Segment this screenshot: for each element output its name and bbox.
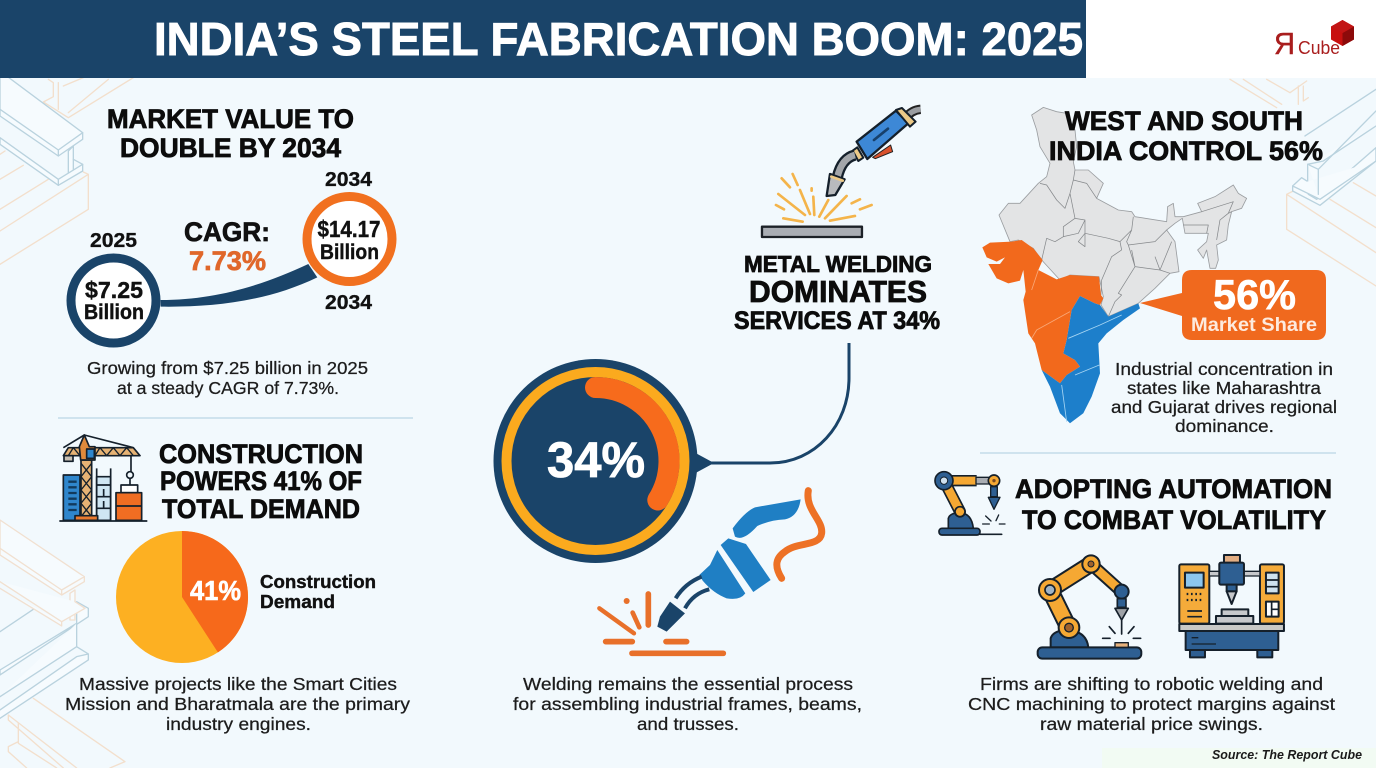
construction description: Massive projects like the Smart Cities bbox=[79, 674, 397, 694]
construction description bbox=[65, 674, 410, 734]
year labels bbox=[90, 169, 373, 314]
logo bbox=[1086, 0, 1376, 78]
heading: metal welding: SERVICES AT 34% bbox=[734, 307, 940, 335]
CAGR label bbox=[184, 217, 270, 276]
callout: 56% market share bbox=[1140, 270, 1326, 340]
heading: market value: DOUBLE BY 2034 bbox=[120, 133, 341, 163]
map: west region bbox=[982, 240, 1103, 383]
regional description bbox=[1111, 359, 1337, 436]
callout: 56% market share: Market Share bbox=[1191, 315, 1317, 336]
construction description: industry engines. bbox=[166, 714, 311, 734]
market value description: Growing from $7.25 billion in 2025 bbox=[87, 358, 368, 378]
pie chart 41% bbox=[116, 531, 248, 663]
growth connector bbox=[161, 264, 317, 307]
year labels: 2034 bbox=[325, 292, 373, 314]
panel: market value bbox=[71, 104, 392, 398]
gauge 34% bbox=[494, 359, 714, 563]
regional description: Industrial concentration in bbox=[1115, 359, 1333, 379]
leader line bbox=[710, 343, 849, 463]
logo: Cube bbox=[1298, 38, 1340, 58]
year labels: 2034 bbox=[325, 169, 373, 191]
circle 2034 value: Billion bbox=[320, 241, 379, 264]
heading: west and south: WEST AND SOUTH bbox=[1065, 106, 1303, 136]
pie legend label: Demand bbox=[260, 591, 335, 612]
title: INDIA’S STEEL FABRICATION BOOM: 2025 bbox=[154, 13, 1083, 65]
market value description bbox=[87, 358, 368, 398]
icon: small robot arm bbox=[935, 472, 1005, 535]
regional description: states like Maharashtra bbox=[1127, 378, 1321, 398]
welding description: Welding remains the essential process bbox=[523, 674, 853, 694]
regional description: and Gujarat drives regional bbox=[1111, 397, 1337, 417]
map: south region bbox=[1042, 296, 1140, 423]
year labels: 2025 bbox=[90, 230, 137, 252]
circle 2034 value bbox=[307, 196, 392, 282]
source note bbox=[1102, 748, 1376, 768]
heading: automation: TO COMBAT VOLATILITY bbox=[1022, 505, 1326, 535]
automation description: raw material price swings. bbox=[1040, 714, 1263, 734]
circle 2025 value bbox=[71, 258, 156, 343]
panel: regional share bbox=[982, 106, 1337, 436]
heading: construction: TOTAL DEMAND bbox=[162, 494, 360, 524]
automation description: CNC machining to protect margins against bbox=[968, 694, 1335, 714]
circle 2025 value: Billion bbox=[84, 301, 144, 324]
callout: 56% market share: 56% bbox=[1213, 271, 1296, 318]
pie legend label bbox=[260, 571, 376, 612]
heading: metal welding: METAL WELDING bbox=[744, 251, 932, 277]
icon: construction crane bbox=[59, 435, 147, 521]
heading: construction: POWERS 41% OF bbox=[160, 466, 362, 496]
heading: metal welding: DOMINATES bbox=[749, 274, 927, 309]
circle 2025 value: $7.25 bbox=[85, 277, 143, 303]
logo cube icon bbox=[1331, 20, 1354, 46]
welding description: and trusses. bbox=[637, 714, 739, 734]
source note: Source: The Report Cube bbox=[1212, 748, 1362, 762]
pie legend label: Construction bbox=[260, 571, 376, 592]
panel: metal welding bbox=[494, 108, 940, 734]
CAGR label: CAGR: bbox=[184, 217, 270, 247]
welding description bbox=[513, 674, 862, 734]
map of India bbox=[982, 107, 1247, 423]
icon: welding torch with sparks bbox=[762, 108, 921, 237]
construction description: Mission and Bharatmala are the primary bbox=[65, 694, 410, 714]
regional description: dominance. bbox=[1175, 416, 1274, 436]
heading: construction bbox=[159, 439, 363, 524]
automation description: Firms are shifting to robotic welding and bbox=[980, 674, 1323, 694]
CAGR label: 7.73% bbox=[189, 246, 266, 276]
header banner bbox=[0, 0, 1086, 78]
circle 2034 value: $14.17 bbox=[318, 216, 380, 242]
icon: large robot arm bbox=[1038, 555, 1141, 659]
automation description bbox=[968, 674, 1335, 734]
heading: construction: CONSTRUCTION bbox=[159, 439, 363, 469]
map: other regions bbox=[999, 107, 1247, 317]
market value description: at a steady CAGR of 7.73%. bbox=[117, 378, 339, 398]
gauge 34%: 34% bbox=[547, 432, 645, 488]
welding description: for assembling industrial frames, beams, bbox=[513, 694, 862, 714]
panel: automation bbox=[935, 472, 1335, 734]
pie chart 41%: 41% bbox=[190, 575, 241, 606]
heading: metal welding bbox=[734, 251, 940, 335]
heading: automation bbox=[1015, 474, 1332, 535]
heading: market value: MARKET VALUE TO bbox=[107, 104, 354, 134]
icon: welding gun bbox=[599, 491, 822, 653]
heading: west and south bbox=[1049, 106, 1323, 166]
heading: market value bbox=[107, 104, 354, 163]
panel: construction demand bbox=[59, 435, 410, 734]
logo text: Я bbox=[1274, 26, 1295, 61]
icon: CNC machine bbox=[1179, 555, 1284, 657]
heading: west and south: INDIA CONTROL 56% bbox=[1049, 136, 1323, 166]
heading: automation: ADOPTING AUTOMATION bbox=[1015, 474, 1332, 504]
